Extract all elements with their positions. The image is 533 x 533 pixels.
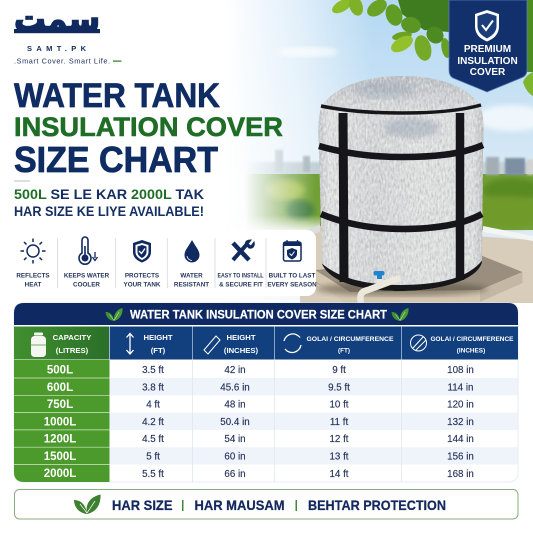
- background photo: sky, trees and rooftop: [244, 0, 533, 303]
- icon: circular arrows: [284, 334, 301, 353]
- label: reflects heat: HEAT: [25, 282, 41, 288]
- capacity column: 1000L: [44, 416, 76, 428]
- logo: [14, 0, 122, 65]
- label: easy to install and secure fit: [218, 272, 264, 288]
- label: water resistant: WATER: [180, 272, 203, 280]
- height ft column: 3.5 ft: [142, 365, 164, 376]
- label: built to last every season: EVERY SEASON: [267, 282, 317, 288]
- icon: calendar shield: [284, 240, 301, 261]
- icon: diameter circle: [410, 335, 426, 351]
- label: keeps water cooler: COOLER: [73, 282, 100, 288]
- label: keeps water cooler: KEEPS WATER: [64, 272, 110, 280]
- circumference inches column: 114 in: [448, 382, 473, 393]
- height ft column: 4.2 ft: [142, 417, 164, 428]
- icon: shield check: [475, 10, 499, 42]
- height inches column: 45.6 in: [220, 382, 250, 393]
- title: SIZE CHART: [14, 139, 218, 180]
- badge text: INSULATION: [457, 56, 518, 67]
- circumference ft column: 14 ft: [329, 469, 349, 480]
- label: protects your tank: PROTECTS: [125, 272, 159, 280]
- label: water resistant: RESISTANT: [174, 282, 209, 288]
- height inches column: 66 in: [224, 469, 246, 480]
- subtitle: [14, 180, 204, 219]
- icon: tank: [31, 332, 46, 357]
- header row: [14, 326, 518, 360]
- height ft column: 4.5 ft: [142, 434, 164, 445]
- size chart table: [14, 303, 518, 482]
- circumference inches column: 144 in: [447, 434, 474, 445]
- title: [14, 77, 283, 180]
- height inches column: 50.4 in: [220, 417, 250, 428]
- insulated water tank: [315, 70, 488, 303]
- height ft column: 5 ft: [146, 452, 160, 462]
- header: circumference inches: [430, 336, 514, 354]
- premium insulation cover badge: [449, 0, 527, 92]
- capacity column: 750L: [47, 399, 73, 411]
- banner text: BEHTAR PROTECTION: [308, 497, 446, 513]
- height inches column: 42 in: [224, 365, 246, 376]
- height inches column: 54 in: [224, 434, 246, 445]
- tagline: .Smart Cover. Smart Life.: [14, 56, 110, 66]
- data rows background: [110, 360, 518, 482]
- circumference inches column: 132 in: [447, 417, 474, 428]
- icon: water drop: [184, 240, 200, 262]
- subtitle: HAR SIZE KE LIYE AVAILABLE!: [14, 204, 204, 219]
- capacity column: 1200L: [44, 434, 76, 446]
- tree leaves: [330, 0, 533, 96]
- header: height inches: (INCHES): [224, 346, 259, 355]
- icon: height arrow: [126, 334, 134, 354]
- banner text: HAR MAUSAM: [194, 497, 284, 513]
- circumference ft column: 12 ft: [329, 434, 349, 445]
- header: height ft: HEIGHT: [143, 333, 173, 342]
- logo mark: سمت: [14, 0, 100, 40]
- badge text: COVER: [470, 67, 506, 78]
- subtitle: 500L SE LE KAR 2000L TAK: [14, 187, 204, 202]
- circumference ft column: 9 ft: [332, 365, 346, 376]
- height inches column: 60 in: [224, 452, 246, 462]
- capacity column: 1500L: [44, 451, 76, 463]
- logo name: SAMT.PK: [27, 44, 87, 53]
- header: circumference ft: [306, 336, 394, 354]
- icon: ruler: [204, 336, 220, 354]
- circumference ft column: 11 ft: [330, 417, 348, 428]
- circumference inches column: 168 in: [447, 469, 474, 480]
- capacity column: 600L: [47, 382, 73, 394]
- label: protects your tank: YOUR TANK: [124, 282, 161, 288]
- header: circumference ft: GOLAI / CIRCUMFERENCE: [306, 336, 394, 343]
- height ft column: 5.5 ft: [142, 469, 164, 480]
- circumference inches column: 156 in: [447, 452, 474, 462]
- icon: thermometer: [79, 237, 98, 264]
- circumference ft column: 10 ft: [329, 400, 349, 411]
- cover straps: [319, 105, 483, 282]
- panel: feature icons: [13, 230, 317, 296]
- label: reflects heat: REFLECTS: [16, 272, 50, 280]
- label: easy to install and secure fit: EASY TO INSTALL: [218, 272, 264, 280]
- header: circumference inches: GOLAI / CIRCUMFERENCE: [430, 336, 514, 343]
- capacity column: 2000L: [44, 468, 76, 480]
- title: INSULATION COVER: [14, 112, 283, 142]
- bottom banner: [14, 490, 518, 519]
- table title band: [14, 303, 518, 325]
- circumference ft column: 9.5 ft: [328, 382, 350, 393]
- label: easy to install and secure fit: & SECURE FIT: [219, 282, 263, 288]
- tap: [360, 271, 400, 303]
- table title band: WATER TANK INSULATION COVER SIZE CHART: [130, 310, 387, 322]
- circumference inches column: 108 in: [447, 365, 474, 376]
- header: capacity: CAPACITY: [53, 333, 91, 342]
- height ft column: 4 ft: [146, 400, 160, 411]
- icon: sun: [20, 238, 46, 264]
- header: circumference inches: (INCHES): [457, 348, 485, 354]
- capacity column: [14, 360, 110, 482]
- header: height ft: (FT): [151, 346, 166, 355]
- icon: tools: [233, 240, 254, 260]
- header: circumference ft: (FT): [338, 348, 350, 354]
- badge text: PREMIUM: [464, 44, 511, 55]
- label: built to last every season: BUILT TO LAST: [269, 272, 315, 280]
- icon: leaves: [74, 494, 101, 514]
- icon: shield: [133, 240, 151, 262]
- banner text: HAR SIZE: [112, 497, 172, 513]
- header: capacity: (LITRES): [56, 346, 89, 355]
- circumference ft column: 13 ft: [329, 452, 349, 462]
- height inches column: 48 in: [224, 400, 246, 411]
- header: height inches: HEIGHT: [226, 333, 256, 342]
- title: WATER TANK: [14, 77, 220, 115]
- height ft column: 3.8 ft: [142, 382, 164, 393]
- circumference inches column: 120 in: [447, 400, 474, 411]
- capacity column: 500L: [47, 364, 73, 376]
- banner text: [112, 497, 446, 513]
